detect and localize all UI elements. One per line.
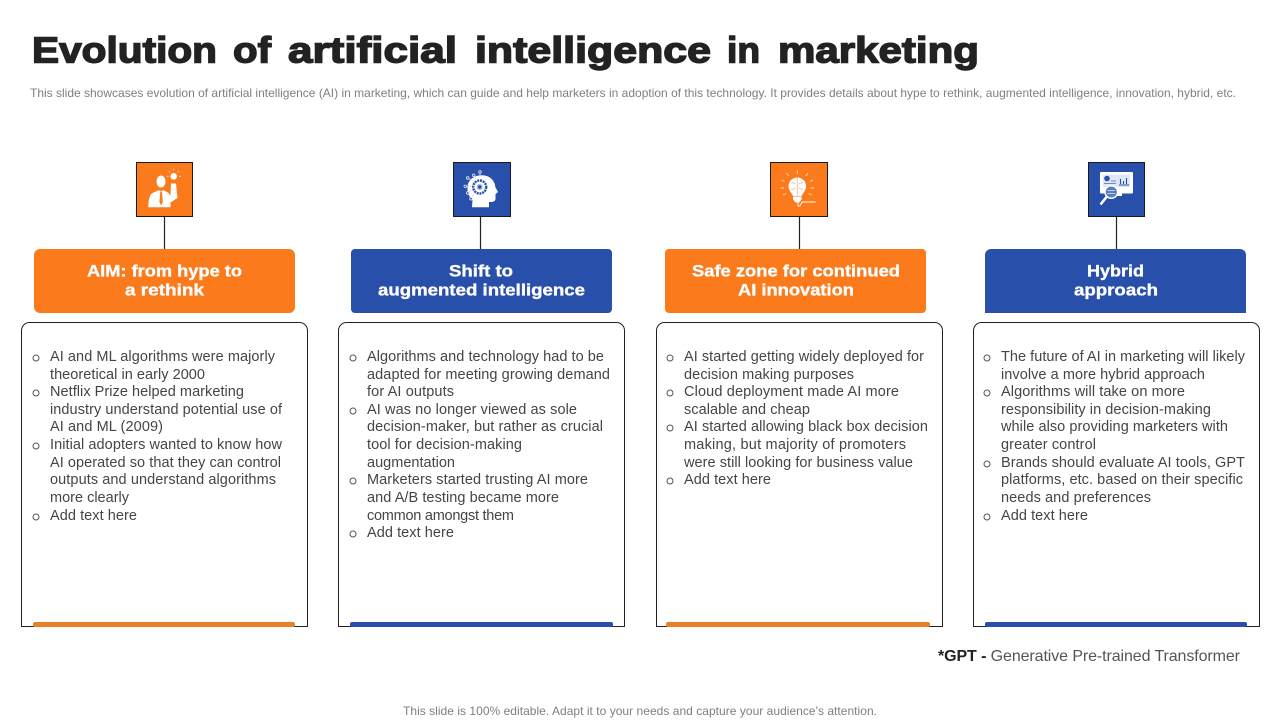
header xyxy=(665,249,926,313)
bullet list: Initial adopters wanted to know how xyxy=(50,437,283,453)
connector line xyxy=(798,216,800,249)
bullet list: greater control xyxy=(1001,437,1096,453)
bullet list: decision making purposes xyxy=(684,367,854,383)
title: artificial xyxy=(288,30,457,70)
bullet list: Add text here xyxy=(367,525,454,541)
title: of xyxy=(233,30,272,70)
title xyxy=(32,30,979,70)
bullet list: tool for decision-making xyxy=(367,437,522,453)
header: Hybrid xyxy=(1087,263,1144,281)
bullet list xyxy=(667,349,928,488)
accent bar xyxy=(666,622,930,627)
bullet list: needs and preferences xyxy=(1001,490,1151,506)
bullet list: AI started allowing black box decision xyxy=(684,419,928,435)
card xyxy=(656,322,942,626)
bullet list: platforms, etc. based on their specific xyxy=(1001,472,1243,488)
bullet list: common amongst them xyxy=(367,508,514,524)
panel: AIM from hype to a rethink xyxy=(22,162,308,627)
header: approach xyxy=(1074,282,1158,300)
title: marketing xyxy=(778,30,979,70)
bullet list: Add text here xyxy=(50,508,137,524)
bullet list xyxy=(350,349,610,541)
bullet list: and A/B testing became more xyxy=(367,490,559,506)
panel: Hybrid approach xyxy=(974,162,1260,627)
bullet list: Cloud deployment made AI more xyxy=(684,384,899,400)
bullet list xyxy=(984,349,1246,524)
bullet list: adapted for meeting growing demand xyxy=(367,367,610,383)
bullet list: theoretical in early 2000 xyxy=(50,367,205,383)
icon: dashboard with magnifier xyxy=(1088,162,1144,216)
header: augmented intelligence xyxy=(378,282,585,300)
panel: Shift to augmented intelligence xyxy=(338,162,624,627)
bullet list: AI and ML (2009) xyxy=(50,419,163,435)
header xyxy=(34,249,295,313)
bullet list: outputs and understand algorithms xyxy=(50,472,276,488)
bullet list: Algorithms and technology had to be xyxy=(367,349,604,365)
bullet list: making, but majority of promoters xyxy=(684,437,906,453)
panel: Safe zone for continued AI innovation xyxy=(656,162,942,627)
bullet list: Algorithms will take on more xyxy=(1001,384,1185,400)
bullet list: Add text here xyxy=(684,472,771,488)
accent bar xyxy=(33,622,295,627)
bullet list: The future of AI in marketing will likely xyxy=(1001,349,1246,365)
card xyxy=(22,322,308,626)
icon: head with gear xyxy=(454,162,510,216)
bullet list: for AI outputs xyxy=(367,384,454,400)
accent bar xyxy=(985,622,1247,627)
bullet list xyxy=(33,349,283,524)
header xyxy=(985,249,1246,313)
footer note: This slide is 100% editable. Adapt it to your needs and capture your audience's attention. xyxy=(403,704,877,718)
bullet list: were still looking for business value xyxy=(683,455,913,471)
bullet list: augmentation xyxy=(367,455,455,471)
accent bar xyxy=(350,622,613,627)
title: intelligence xyxy=(475,30,711,70)
bullet list: decision-maker, but rather as crucial xyxy=(367,419,603,435)
bullet list: scalable and cheap xyxy=(684,402,810,418)
card xyxy=(338,322,624,626)
connector line xyxy=(480,216,482,249)
card xyxy=(974,322,1260,626)
header: a rethink xyxy=(125,282,205,300)
bullet list: AI and ML algorithms were majorly xyxy=(50,349,276,365)
bullet list: more clearly xyxy=(50,490,130,506)
title: Evolution xyxy=(32,30,217,70)
bullet list: AI was no longer viewed as sole xyxy=(367,402,577,418)
title: in xyxy=(727,30,760,70)
bullet list: responsibility in decision-making xyxy=(1001,402,1211,418)
bullet list: AI operated so that they can control xyxy=(50,455,281,471)
footnote: GPT definition: *GPT - Generative Pre-trained Transformer xyxy=(938,648,1241,665)
bullet list: involve a more hybrid approach xyxy=(1001,367,1205,383)
bullet list: AI started getting widely deployed for xyxy=(684,349,924,365)
icon: person with lightbulb xyxy=(136,162,192,216)
bullet list: Brands should evaluate AI tools, GPT xyxy=(1001,455,1245,471)
bullet list: Netflix Prize helped marketing xyxy=(50,384,244,400)
bullet list: industry understand potential use of xyxy=(50,402,283,418)
connector line xyxy=(1116,216,1118,249)
bullet list: Add text here xyxy=(1001,508,1088,524)
icon: brain lightbulb xyxy=(770,162,828,216)
header: Shift to xyxy=(449,263,513,281)
bullet list: Marketers started trusting AI more xyxy=(367,472,588,488)
header: AIM: from hype to xyxy=(87,263,242,281)
header xyxy=(351,249,612,313)
header: AI innovation xyxy=(738,282,854,300)
bullet list: while also providing marketers with xyxy=(1000,419,1228,435)
subtitle: This slide showcases evolution of artificial intelligence (AI) in marketing, which can guide and help marketers in adoption of this technology. It provides details about hype to rethink, augmented intelligence, innovation, hybrid, etc. xyxy=(30,86,1236,100)
connector line xyxy=(164,216,166,249)
header: Safe zone for continued xyxy=(692,263,900,281)
